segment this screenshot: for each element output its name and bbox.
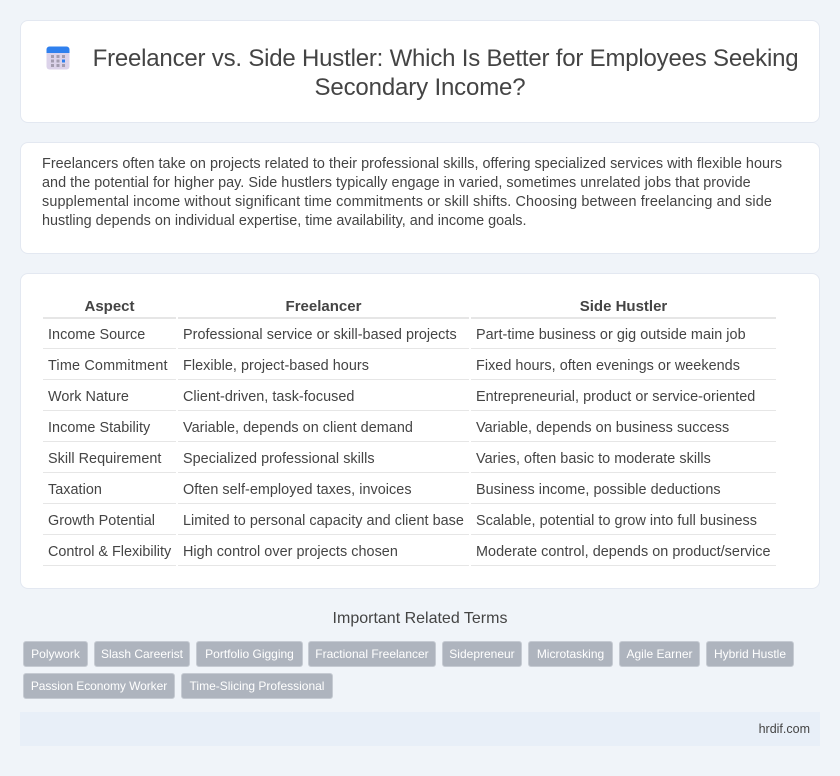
title: Freelancer vs. Side Hustler: Which Is Better for Employees Seeking [93, 45, 798, 72]
comparison table: Limited to personal capacity and client base [183, 513, 464, 529]
text block: intro paragraph: and the potential for higher pay. Side hustlers typically engage in varied, sometimes unrelated jobs that provide [42, 175, 751, 191]
row: Skill Requirement: Skill Requirement [48, 451, 161, 467]
tag: Passion Economy Worker: Passion Economy Worker [31, 679, 167, 693]
title line 2: Secondary Income? [315, 74, 525, 101]
header: Freelancer: Freelancer [286, 298, 361, 315]
tag: Slash Careerist [94, 641, 190, 667]
comparison table: Business income, possible deductions [476, 482, 721, 498]
tag: Hybrid Hustle [706, 641, 794, 667]
comparison table: Varies, often basic to moderate skills [476, 451, 711, 467]
tag: Microtasking: Microtasking [537, 647, 604, 661]
row: Growth Potential: Growth Potential [48, 513, 155, 529]
row: Control & Flexibility: Control & Flexibility [48, 544, 171, 560]
text block: intro paragraph: supplemental income without significant time commitments or skill shifts. Choosing between freelancing and side [42, 194, 772, 210]
footer: site name: hrdif.com [759, 722, 810, 736]
tag: Time-Slicing Professional: Time-Slicing Professional [190, 679, 324, 693]
comparison table: Flexible, project-based hours [183, 358, 369, 374]
panel: title card [20, 20, 820, 123]
comparison table: High control over projects chosen [183, 544, 398, 560]
panel: comparison table card [20, 273, 820, 589]
comparison table: Client-driven, task-focused [183, 389, 354, 405]
comparison table: Specialized professional skills [183, 451, 375, 467]
text block: intro paragraph [42, 156, 782, 229]
comparison table: Often self-employed taxes, invoices [183, 482, 412, 498]
header: Side Hustler: Side Hustler [580, 298, 667, 315]
tag: Time-Slicing Professional [181, 673, 333, 699]
tag: Microtasking [528, 641, 613, 667]
row: Taxation: Taxation [48, 482, 102, 498]
tag: Slash Careerist: Slash Careerist [101, 647, 183, 661]
tag: Polywork: Polywork [31, 647, 80, 661]
comparison table [43, 298, 776, 566]
row: Income Source: Income Source [48, 327, 145, 343]
row: Work Nature: Work Nature [48, 389, 129, 405]
text block: intro paragraph: hustling depends on individual expertise, time availability, and income goals. [42, 213, 527, 229]
comparison table: Scalable, potential to grow into full business [476, 513, 757, 529]
tag: Polywork [23, 641, 88, 667]
tag: Agile Earner: Agile Earner [626, 647, 693, 661]
header: Aspect: Aspect [84, 298, 135, 315]
row: Income Stability: Income Stability [48, 420, 150, 436]
text block: intro paragraph: Freelancers often take on projects related to their professional skills, offering specialized services with flexible hours [42, 156, 782, 172]
heading: Important Related Terms: Important Related Terms [333, 610, 507, 627]
comparison table: Variable, depends on business success [476, 420, 729, 436]
tag: Hybrid Hustle: Hybrid Hustle [714, 647, 786, 661]
tag: Sidepreneur [442, 641, 522, 667]
tag: Agile Earner [619, 641, 700, 667]
tag: Portfolio Gigging [196, 641, 303, 667]
comparison table: Entrepreneurial, product or service-oriented [476, 389, 755, 405]
tag: Fractional Freelancer [308, 641, 436, 667]
row: Time Commitment: Time Commitment [48, 358, 168, 374]
tag: Fractional Freelancer: Fractional Freelancer [315, 647, 429, 661]
comparison table: Professional service or skill-based projects [183, 327, 457, 343]
comparison table: Part-time business or gig outside main job [476, 327, 746, 343]
tag: Portfolio Gigging: Portfolio Gigging [205, 647, 294, 661]
comparison table: Variable, depends on client demand [183, 420, 413, 436]
footer bar [20, 712, 820, 746]
comparison table: Moderate control, depends on product/service [476, 544, 771, 560]
comparison table: Fixed hours, often evenings or weekends [476, 358, 740, 374]
tag: Sidepreneur: Sidepreneur [449, 647, 515, 661]
panel: intro text card [20, 142, 820, 254]
icon: calendar [46, 46, 70, 70]
tag: Passion Economy Worker [23, 673, 175, 699]
